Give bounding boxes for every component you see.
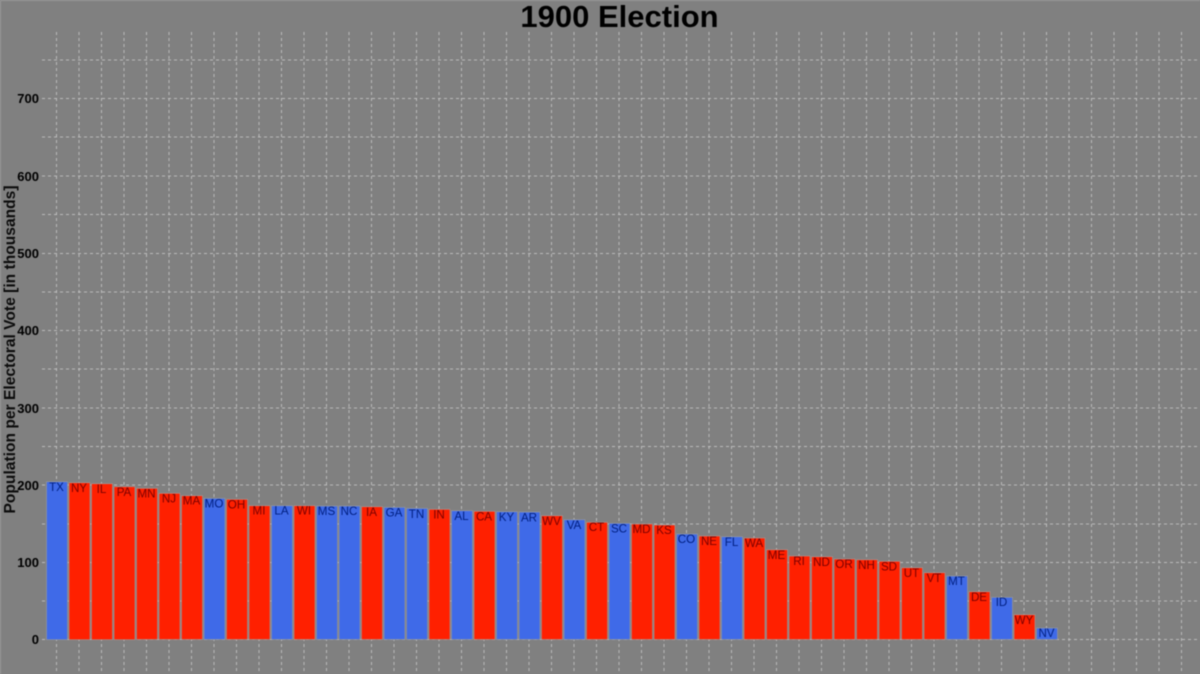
title: 1900 Election [520, 0, 719, 34]
bars: states by population per electoral vote: NH [858, 559, 875, 572]
bars: states by population per electoral vote: MS [318, 505, 335, 518]
bars: states by population per electoral vote: MO [205, 498, 223, 510]
bars: states by population per electoral vote: CO [678, 533, 695, 546]
y-axis tick labels: 100 [17, 555, 39, 570]
bars: states by population per electoral vote: MN [137, 488, 156, 500]
y-axis tick labels: 600 [17, 169, 39, 184]
bars: states by population per electoral vote: OH [228, 498, 245, 512]
y-axis tick labels: 300 [17, 401, 39, 416]
bars: states by population per electoral vote: SC [611, 522, 627, 536]
bars: states by population per electoral vote: CA [476, 510, 492, 524]
bars: states by population per electoral vote: OR [835, 558, 853, 571]
bars: states by population per electoral vote: TX [49, 481, 64, 494]
bars: states by population per electoral vote: VA [567, 519, 582, 532]
bars: states by population per electoral vote: FL [725, 536, 739, 549]
y-axis tick labels: 200 [17, 478, 39, 493]
bars: states by population per electoral vote: ME [768, 549, 785, 562]
bars: states by population per electoral vote: KS [656, 524, 672, 537]
bars: states by population per electoral vote: SD [881, 560, 897, 574]
bars: states by population per electoral vote: MA [183, 494, 200, 508]
y-axis tick labels: 500 [17, 246, 39, 261]
bars: states by population per electoral vote: CT [589, 521, 604, 534]
y-axis tick labels: 400 [17, 323, 39, 338]
y-axis tick labels: 700 [17, 91, 39, 106]
bars: states by population per electoral vote: UT [904, 567, 919, 580]
y-axis tick labels: 0 [32, 632, 39, 647]
bars: states by population per electoral vote: NE [701, 535, 717, 548]
bars: states by population per electoral vote: LA [274, 504, 289, 518]
bars: states by population per electoral vote: AR [521, 512, 537, 524]
bars: states by population per electoral vote: NC [341, 505, 357, 518]
bars: states by population per electoral vote: WV [542, 515, 561, 528]
bars: states by population per electoral vote: AL [454, 510, 469, 523]
bars: states by population per electoral vote: VT [927, 572, 941, 585]
bars: states by population per electoral vote: DE [971, 591, 987, 604]
bars: states by population per electoral vote: MT [948, 575, 965, 588]
bars: states by population per electoral vote: MI [253, 504, 265, 518]
bars: states by population per electoral vote: WA [745, 537, 763, 550]
bars: states by population per electoral vote: WI [297, 504, 311, 518]
bars: states by population per electoral vote: IL [97, 483, 107, 496]
bars: states by population per electoral vote: ID [996, 596, 1007, 609]
bars: states by population per electoral vote: MD [632, 523, 651, 536]
y-axis title: Population per Electoral Vote [in thousands] [2, 185, 19, 514]
bars: states by population per electoral vote: IA [366, 506, 377, 519]
bars: states by population per electoral vote: NJ [162, 492, 176, 506]
bars: states by population per electoral vote: NV [1038, 627, 1055, 640]
bars: states by population per electoral vote: ND [813, 556, 830, 569]
bars: states by population per electoral vote: RI [793, 555, 805, 568]
bars: states by population per electoral vote: KY [499, 511, 514, 524]
bars: states by population per electoral vote: GA [386, 506, 403, 520]
bars: states by population per electoral vote: WY [1015, 614, 1034, 627]
bars: states by population per electoral vote: TN [409, 508, 424, 521]
bars: states by population per electoral vote: PA [117, 486, 132, 499]
bars: states by population per electoral vote: NY [71, 482, 87, 495]
y-axis tick labels [17, 91, 39, 647]
bars: states by population per electoral vote: IN [433, 508, 445, 522]
bars: states by population per electoral vote [46, 481, 1058, 640]
